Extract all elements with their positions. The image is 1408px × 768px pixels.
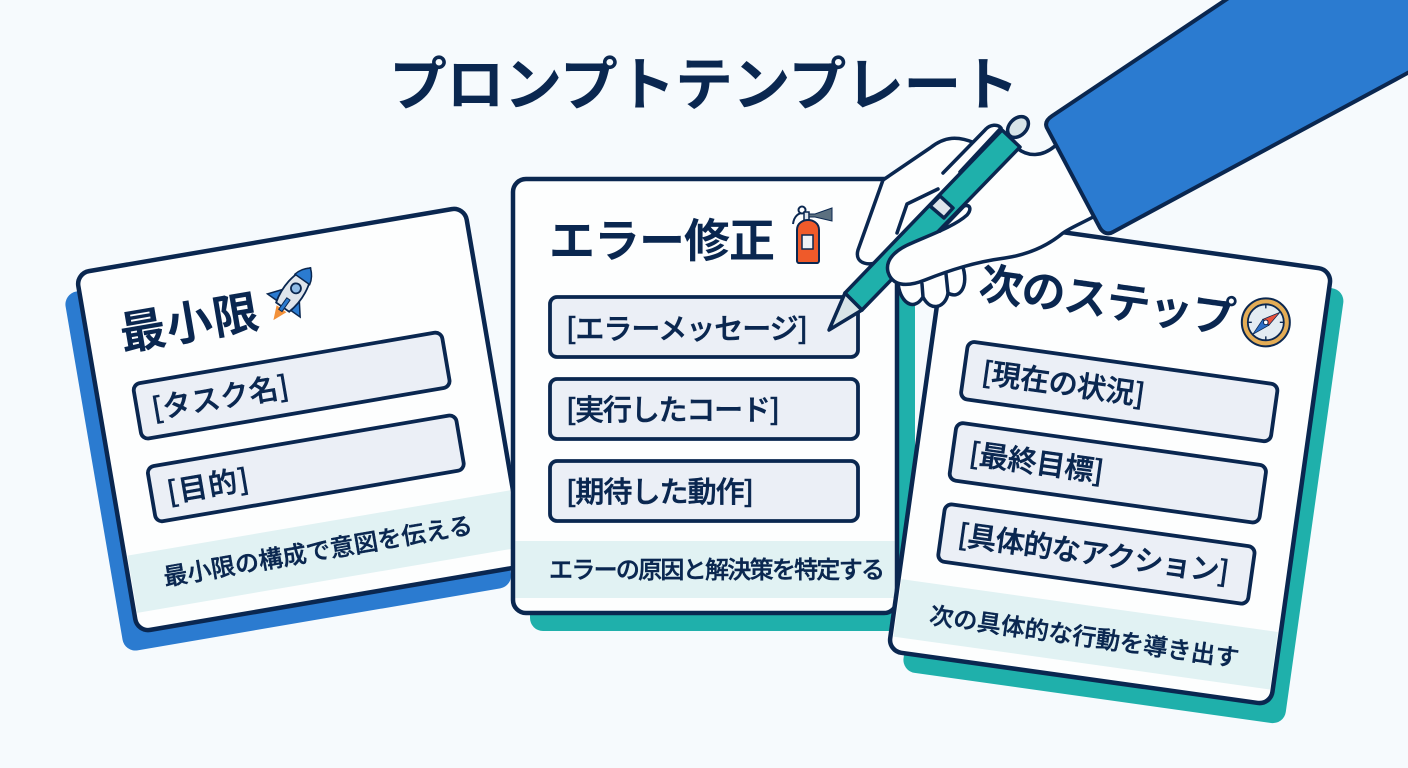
- footer band: 次の具体的な行動を導き出す: [928, 596, 1242, 674]
- panel: error fix card: [513, 179, 915, 631]
- sleeve: [1046, 0, 1408, 233]
- card heading: エラー修正: [549, 205, 775, 271]
- field: purpose: [目的]: [164, 457, 252, 512]
- field: expected behaviour: [期待した動作]: [566, 469, 754, 511]
- hand: back outline: [857, 138, 1055, 264]
- illustration: hand holding pen: [829, 0, 1408, 330]
- field: error message: [550, 297, 858, 357]
- panel: next step card: [886, 216, 1348, 725]
- footer band: [516, 541, 894, 598]
- finger tip sliver: [940, 206, 964, 231]
- pen barrel: [845, 130, 1020, 310]
- card shadow: blue: [63, 227, 513, 653]
- field: task name: [タスク名]: [148, 364, 291, 428]
- footer band: エラーの原因と解決策を特定する: [549, 550, 885, 585]
- index finger: [897, 189, 938, 233]
- icon: rocket: [257, 256, 327, 332]
- pen: [829, 113, 1032, 330]
- hand: back of hand: [857, 138, 1095, 280]
- field: executed code: [実行したコード]: [566, 387, 780, 429]
- card shadow: teal: [902, 236, 1345, 725]
- pen clip: [943, 125, 1001, 173]
- field: expected behaviour: [550, 461, 858, 521]
- pen cap: [1004, 113, 1032, 141]
- footer band: 最小限の構成で意図を伝える: [160, 505, 475, 593]
- footer band: [893, 579, 1278, 689]
- title: プロンプトテンプレート: [389, 38, 1019, 122]
- card body: [76, 207, 526, 632]
- icon: compass: [1242, 298, 1290, 346]
- field: final goal: [949, 422, 1267, 523]
- field: concrete action: [具体的なアクション]: [956, 512, 1232, 591]
- footer band: [127, 490, 520, 613]
- field: final goal: [最終目標]: [967, 431, 1107, 491]
- panel: minimum card: [60, 207, 529, 653]
- card heading: 次のステップ: [976, 247, 1240, 347]
- pen tip: [829, 293, 862, 330]
- field: current situation: [現在の状況]: [979, 350, 1148, 414]
- card heading: 最小限: [114, 276, 263, 364]
- field: current situation: [960, 341, 1278, 442]
- hand: palm and thumb: [887, 206, 1095, 284]
- icon: fire extinguisher: [793, 206, 832, 263]
- field: purpose: [147, 414, 465, 522]
- field: concrete action: [937, 504, 1255, 605]
- field: error message: [エラーメッセージ]: [566, 306, 808, 348]
- field: task name: [133, 332, 451, 440]
- field: executed code: [550, 379, 858, 439]
- pen grip band: [930, 196, 953, 218]
- small fingers: [898, 264, 965, 307]
- card shadow: teal: [530, 197, 915, 631]
- card body: [888, 216, 1332, 705]
- card body: [513, 179, 897, 613]
